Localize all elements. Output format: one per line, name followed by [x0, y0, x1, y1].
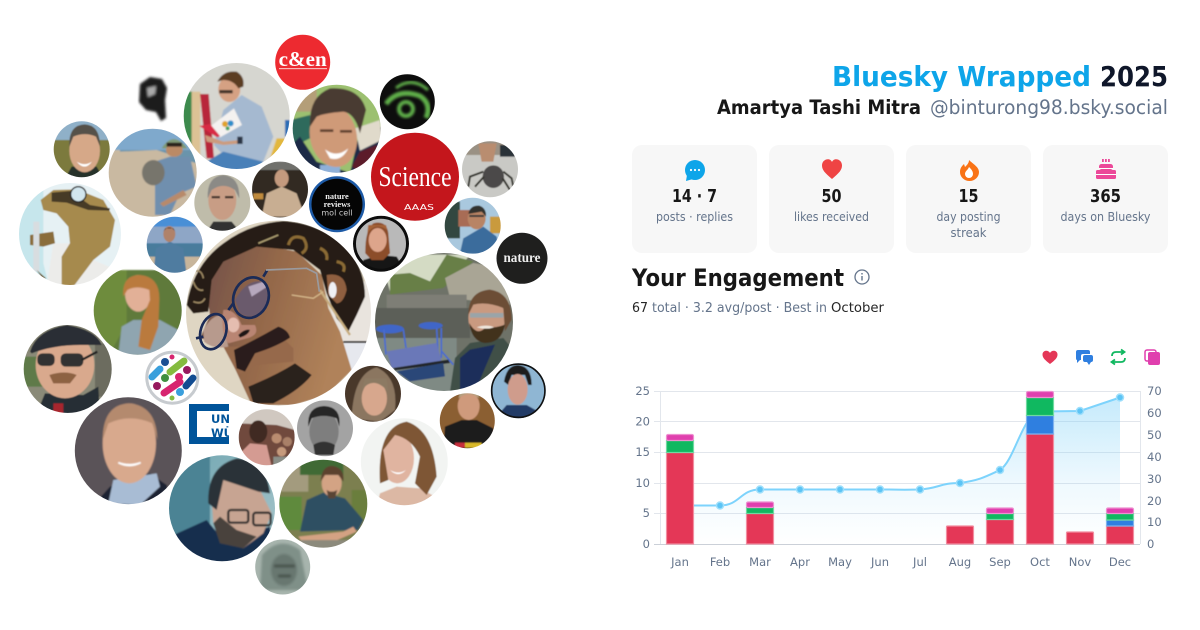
stacked bars: [666, 392, 1134, 544]
bars: Jan: [666, 434, 694, 544]
avatar: blonde woman: [92, 270, 185, 357]
avatar: smiling man: [292, 84, 381, 173]
logo: Science AAAS: AAAS: [404, 203, 434, 212]
icon: heart: [822, 159, 842, 179]
stat card: likes received: 50: [822, 187, 842, 207]
right axis labels: 10: [1147, 515, 1162, 529]
logo: c&en: [275, 35, 330, 90]
stat card: day posting streak: streak: [950, 226, 987, 240]
avatar: grey haired man: [193, 173, 252, 232]
month labels: Mar: [749, 555, 771, 569]
stat card: days on Bluesky: days on Bluesky: [1060, 210, 1150, 224]
legend: replies: [1076, 350, 1093, 365]
logo: nature: nature: [504, 250, 540, 265]
avatar: woman with grey-blonde hair: [343, 365, 402, 423]
avatar: green microscopy: [379, 74, 435, 130]
logo: university Würzburg: [189, 404, 241, 444]
bars: Dec: [1106, 508, 1134, 544]
logo: c&en: c&en: [279, 47, 327, 71]
heading: Bluesky Wrapped 2025: Bluesky Wrapped: [832, 60, 1091, 93]
left axis labels: 15: [635, 445, 650, 459]
right axis labels: 30: [1147, 472, 1162, 486]
left axis labels: [635, 384, 650, 551]
logo: nature reviews mol cell: reviews: [324, 200, 351, 209]
combo chart: monthly engagement: [635, 384, 1162, 569]
avatar: stone statue: [255, 539, 311, 595]
avatar: man on beach with hat: [107, 127, 198, 218]
avatar: greyscale man: [295, 400, 355, 457]
chart legend icons: [1042, 350, 1160, 365]
avatar: man reading book: [184, 63, 290, 169]
grid lines: [654, 391, 1140, 544]
month labels: Nov: [1069, 555, 1091, 569]
logo: university Würzburg: WÜ: [211, 425, 233, 440]
right axis labels: [1147, 384, 1162, 551]
right axis labels: 40: [1147, 450, 1162, 464]
legend: reposts: [1112, 350, 1125, 364]
month labels: May: [828, 555, 852, 569]
month labels: Oct: [1030, 555, 1050, 569]
stat card: posts and replies: 14 · 7: [672, 187, 717, 207]
bars: Nov: [1066, 532, 1094, 544]
avatar: woman on white background: [360, 417, 448, 507]
avatar: main portrait, man with round glasses: [183, 218, 373, 408]
avatar: bald man in suit: [73, 395, 183, 505]
month labels: [670, 555, 1131, 569]
stat card: posts and replies: [632, 145, 757, 253]
left axis labels: 10: [635, 476, 650, 490]
left axis labels: 25: [635, 384, 650, 398]
icon: info: [855, 270, 869, 284]
avatar: man in science t-shirt: [438, 392, 497, 450]
avatar: sketch: [139, 77, 167, 121]
stat card: likes received: [769, 145, 894, 253]
month labels: Dec: [1109, 555, 1131, 569]
logo: nature reviews mol cell: nature: [325, 192, 349, 201]
engagement summary: October: [831, 301, 885, 316]
icon: chat bubble: [685, 160, 705, 181]
bars: Mar: [746, 502, 774, 544]
avatar: man in cap with sunglasses: [22, 323, 113, 413]
logo: nature reviews mol cell: mol cell: [321, 208, 353, 218]
engagement summary: 67: [632, 301, 648, 316]
icon: flame: [960, 160, 979, 181]
left axis labels: 5: [643, 506, 650, 520]
user name and handle: @binturong98.bsky.social: [930, 96, 1168, 119]
stat card: day posting streak: 15: [958, 187, 978, 207]
stat card: day posting streak: day posting: [936, 210, 1000, 224]
avatar: man with glasses looking down: [167, 453, 277, 563]
logo: Science AAAS: [371, 133, 459, 221]
logo: university Würzburg: UNI: [211, 412, 234, 426]
avatar: man in dark room: [252, 162, 310, 218]
heading: Your Engagement: Your Engagement: [631, 264, 844, 292]
stat card: day posting streak: [906, 145, 1031, 253]
right axis labels: 50: [1147, 428, 1162, 442]
avatar: woman with black border: [352, 215, 410, 273]
stat card: posts and replies: posts · replies: [656, 210, 733, 224]
left axis labels: 0: [643, 537, 650, 551]
month labels: Jul: [912, 555, 927, 569]
heading: Bluesky Wrapped 2025: 2025: [1100, 60, 1168, 93]
month labels: Feb: [710, 555, 730, 569]
logo: round multicolour dots: [145, 351, 199, 405]
month labels: Sep: [989, 555, 1011, 569]
bars: Aug: [946, 526, 974, 544]
month labels: Apr: [790, 555, 810, 569]
right axis labels: 60: [1147, 406, 1162, 420]
month labels: Jan: [670, 555, 689, 569]
avatar: man with green hills: [52, 120, 112, 178]
left axis labels: 20: [635, 414, 650, 428]
avatar: spider robot: [460, 140, 520, 198]
legend: likes: [1042, 351, 1058, 364]
user name and handle: Amartya Tashi Mitra: [717, 96, 921, 119]
bars: Sep: [986, 508, 1014, 544]
month labels: Jun: [870, 555, 889, 569]
avatar: man leaning in garden: [278, 458, 368, 548]
avatar: man on beach in blue shirt: [146, 216, 203, 273]
legend: quotes: [1145, 350, 1160, 365]
stat card: days on Bluesky: [1043, 145, 1168, 253]
logo: Science AAAS: Science: [378, 162, 452, 193]
avatar: woman with dark hair against sky: [490, 362, 547, 420]
icon: cake: [1096, 159, 1116, 179]
avatar: man by water with blue rig: [375, 253, 513, 391]
engagement summary: total · 3.2 avg/post · Best in: [652, 301, 827, 316]
cumulative area and line: [680, 394, 1124, 544]
avatar: dinosaur scientist illustration: [18, 180, 122, 290]
stat card: likes received: likes received: [794, 210, 869, 224]
avatar cluster: [18, 35, 547, 595]
bars: Oct: [1026, 392, 1054, 544]
right axis labels: 70: [1147, 384, 1162, 398]
user name and handle: [717, 96, 1168, 119]
month labels: Aug: [949, 555, 971, 569]
avatar: man in blue jacket: [443, 197, 502, 255]
logo: nature reviews mol cell: [309, 176, 365, 232]
logo: nature: [496, 233, 548, 284]
stat card: days on Bluesky: 365: [1090, 187, 1121, 207]
avatar: selfie in crowd: [238, 408, 295, 467]
right axis labels: 0: [1147, 537, 1154, 551]
right axis labels: 20: [1147, 494, 1162, 508]
